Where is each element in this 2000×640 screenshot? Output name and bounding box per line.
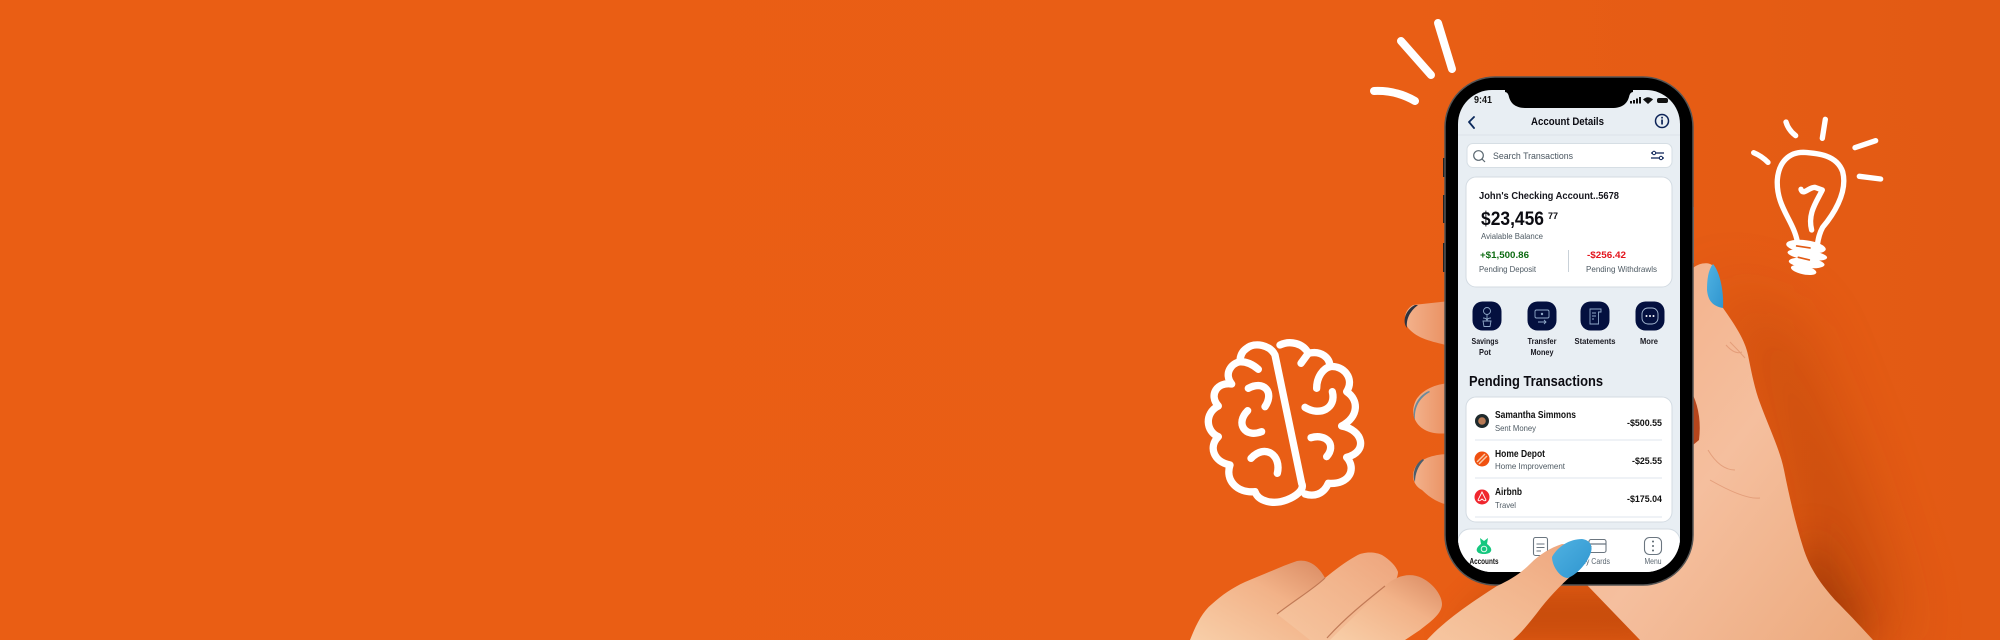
row: Home Depot: -$25.55 — [1632, 456, 1663, 467]
row: Samantha Simmons: Samantha Simmons — [1495, 410, 1576, 421]
balance card: -$256.42 — [1587, 250, 1626, 261]
phone body — [1445, 77, 1693, 585]
balance card: John's Checking Account..5678 — [1479, 190, 1619, 202]
info icon — [1656, 114, 1668, 128]
action: transfer money: Money — [1530, 347, 1554, 357]
header divider — [1458, 134, 1680, 136]
search bar: Search Transactions — [1493, 151, 1573, 162]
action: savings pot: Pot — [1479, 347, 1491, 357]
row: Airbnb: Airbnb — [1495, 487, 1522, 498]
action: savings pot — [1472, 302, 1502, 357]
screen — [1458, 85, 1680, 579]
fingers behind phone — [1405, 301, 1450, 505]
thumb nail — [1707, 264, 1723, 308]
pointing finger nail — [1552, 539, 1592, 578]
pointing finger — [1427, 539, 1592, 640]
icon: brain — [1208, 343, 1361, 502]
balance card: $23,456 — [1481, 209, 1544, 230]
row: Samantha Simmons — [1475, 410, 1663, 433]
balance card — [1466, 177, 1672, 287]
action: savings pot: Savings — [1472, 336, 1499, 346]
tab: menu: Menu — [1644, 557, 1662, 566]
heading: pending transactions: Pending Transactions — [1469, 374, 1603, 390]
action: more: More — [1640, 336, 1658, 346]
search bar — [1467, 144, 1672, 168]
tab: accounts — [1470, 538, 1499, 566]
action: transfer money — [1528, 302, 1557, 357]
row: Home Depot — [1474, 449, 1663, 471]
tab bar — [1458, 528, 1680, 572]
balance card: Pending Withdrawls — [1586, 264, 1657, 274]
row: Airbnb — [1474, 488, 1662, 508]
row: Home Depot: Home Improvement — [1495, 461, 1566, 471]
balance card: 77 — [1548, 211, 1558, 221]
action: statements — [1574, 302, 1616, 346]
action: transfer money: Transfer — [1528, 336, 1557, 346]
tab: menu — [1644, 538, 1662, 566]
hand shadow — [1450, 290, 1895, 640]
row: Home Depot: Home Depot — [1495, 449, 1546, 460]
header title: Account Details — [1531, 116, 1604, 128]
back chevron — [1469, 117, 1474, 128]
row: Airbnb: Travel — [1495, 500, 1516, 510]
row: Samantha Simmons: Sent Money — [1495, 423, 1537, 433]
icon: lightbulb — [1754, 119, 1881, 277]
phone — [1443, 77, 1694, 585]
balance card: Avialable Balance — [1481, 232, 1544, 241]
tab: accounts: Accounts — [1470, 556, 1499, 566]
balance card: +$1,500.86 — [1480, 250, 1529, 261]
row: Samantha Simmons: -$500.55 — [1627, 418, 1663, 429]
status bar time: 9:41 — [1474, 95, 1492, 106]
icon: burst lines — [1374, 23, 1452, 101]
holding hand — [1587, 263, 1873, 640]
status bar icons — [1630, 97, 1668, 104]
action: statements: Statements — [1574, 336, 1616, 346]
row: Airbnb: -$175.04 — [1627, 494, 1663, 505]
side buttons — [1443, 158, 1694, 272]
balance card: Pending Deposit — [1479, 264, 1537, 274]
lower hand fingers — [1190, 552, 1442, 640]
tab: my cards: My Cards — [1580, 557, 1610, 566]
tab: my cards — [1584, 539, 1610, 566]
tab: transactions — [1534, 538, 1548, 556]
action: more — [1636, 302, 1664, 346]
transactions card — [1466, 397, 1672, 522]
notch — [1505, 90, 1633, 108]
